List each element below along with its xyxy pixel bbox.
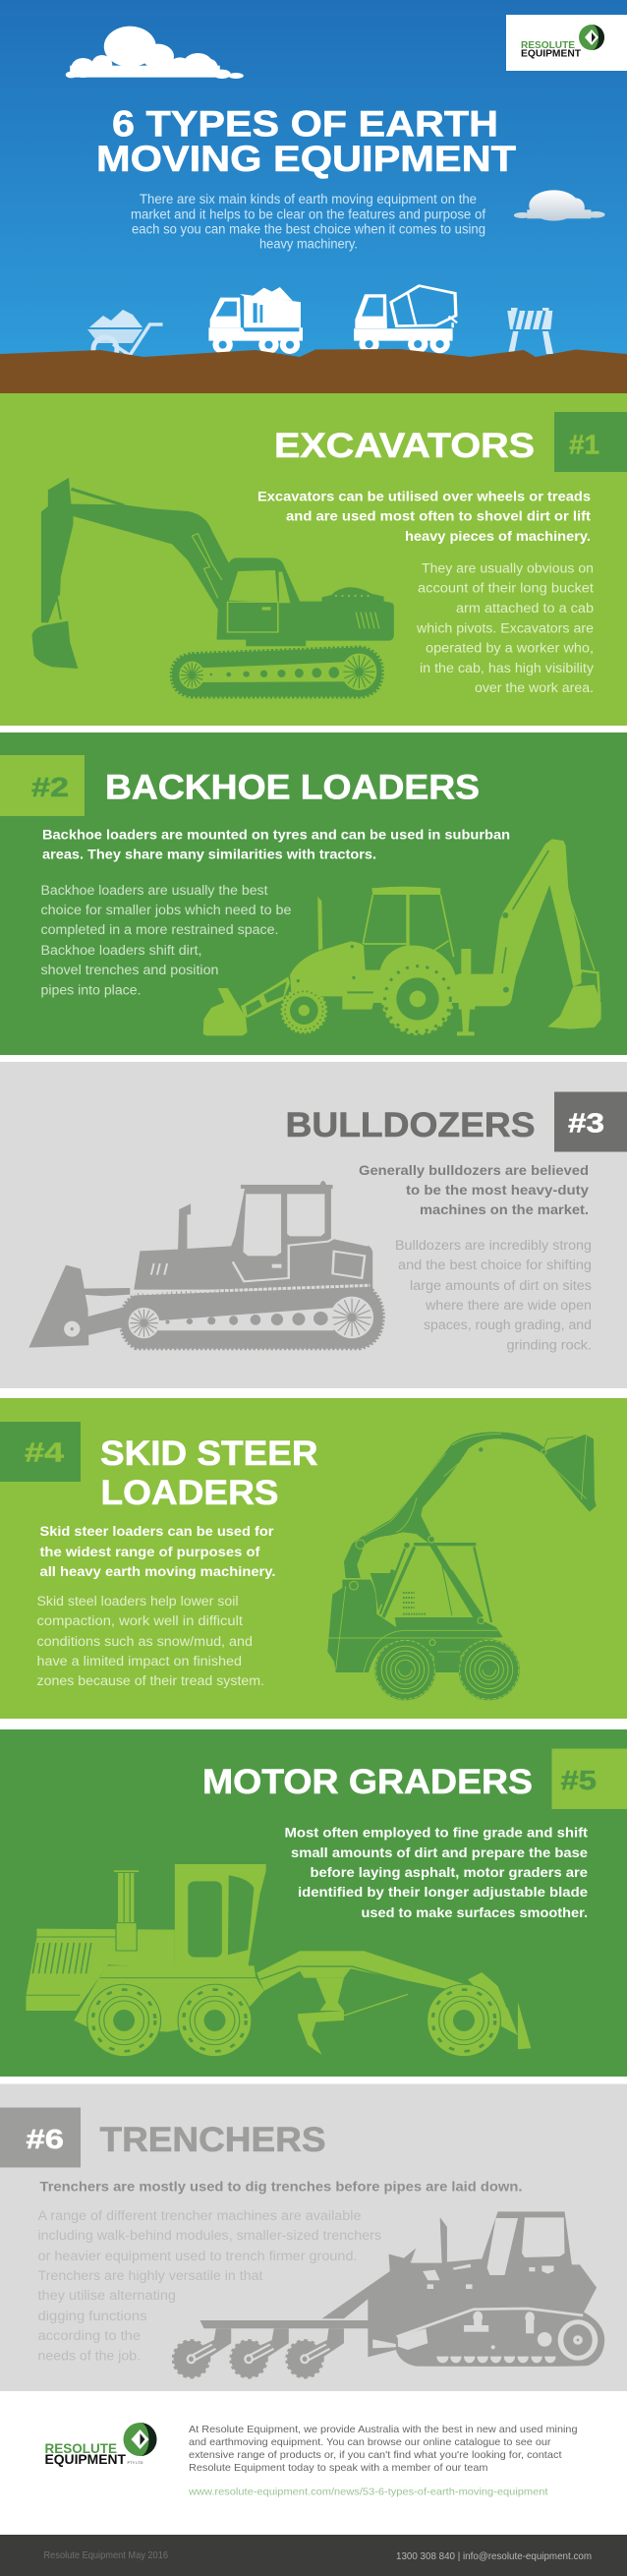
body text: including walk-behind modules, smaller-sized trenchers: [37, 2228, 381, 2243]
lead text: to be the most heavy-duty: [406, 1182, 589, 1198]
company description: [189, 2424, 578, 2474]
lead text: Backhoe loaders are mounted on tyres and can be used in suburban: [42, 826, 510, 842]
title: 6 TYPES OF EARTH: [112, 102, 498, 144]
contact details: 1300 308 840 | info@resolute-equipment.com: [396, 2550, 592, 2562]
body text: Bulldozers are incredibly strong: [395, 1238, 592, 1253]
number badge 5: #5: [560, 1765, 597, 1795]
company description: extensive range of products or, if you can't find what you're looking for, contact: [189, 2449, 562, 2461]
company description: At Resolute Equipment, we provide Australia with the best in new and used mining: [189, 2424, 578, 2435]
body text: they utilise alternating: [37, 2288, 176, 2303]
panel: excavators: [0, 393, 627, 726]
lead text: Most often employed to fine grade and shift: [285, 1825, 588, 1841]
panel: header sky: [0, 0, 627, 394]
body text: operated by a worker who,: [426, 641, 594, 655]
body text: in the cab, has high visibility: [420, 661, 594, 675]
body text: A range of different trencher machines are available: [37, 2208, 362, 2223]
lead text: used to make surfaces smoother.: [362, 1904, 588, 1920]
body text: They are usually obvious on: [422, 560, 594, 576]
heading: backhoe loaders: BACKHOE LOADERS: [105, 769, 480, 806]
lead text: heavy pieces of machinery.: [405, 528, 591, 544]
number badge 5: [552, 1748, 627, 1809]
panel: backhoe loaders: [0, 732, 627, 1055]
lead text: [359, 1162, 589, 1217]
body text: according to the: [37, 2328, 141, 2343]
body text: and the best choice for shifting: [398, 1258, 592, 1272]
lead text: and are used most often to shovel dirt or lift: [286, 507, 591, 523]
number badge 1: [554, 412, 627, 472]
intro text: heavy machinery.: [259, 236, 358, 252]
icon: motor grader: [26, 1864, 531, 2057]
lead text: [39, 1523, 275, 1579]
icon: cement mixer: [354, 286, 457, 353]
lead text: Excavators can be utilised over wheels or treads: [257, 488, 591, 503]
footer logo: PTY LTD: [128, 2461, 143, 2465]
body text: Backhoe loaders are usually the best: [41, 883, 268, 898]
lead text: identified by their longer adjustable blade: [298, 1884, 588, 1900]
icon: road barrier: [507, 308, 553, 354]
heading: skid steer loaders: SKID STEER: [100, 1434, 318, 1473]
footer logo: RESOLUTE: [45, 2440, 117, 2456]
body text: conditions such as snow/mud, and: [37, 1634, 253, 1649]
heading: trenchers: TRENCHERS: [100, 2121, 326, 2159]
lead text: small amounts of dirt and prepare the base: [291, 1844, 588, 1860]
body text: [395, 1238, 592, 1353]
body text: over the work area.: [475, 680, 594, 695]
lead text: all heavy earth moving machinery.: [39, 1563, 275, 1579]
icon: trencher: [174, 2211, 604, 2377]
icon: dump truck: [208, 287, 303, 354]
lead text: [42, 826, 510, 861]
title: [96, 102, 516, 179]
body text: [37, 2208, 381, 2364]
lead text: Trenchers are mostly used to dig trenches before pipes are laid down.: [39, 2179, 523, 2195]
panel: company footer: [0, 2391, 627, 2535]
lead text: [285, 1825, 588, 1920]
body text: digging functions: [37, 2309, 147, 2323]
number badge 4: #4: [25, 1437, 65, 1467]
body text: pipes into place.: [41, 983, 142, 997]
body text: completed in a more restrained space.: [41, 922, 279, 937]
body text: account of their long bucket: [418, 580, 594, 596]
body text: Skid steel loaders help lower soil: [37, 1594, 238, 1609]
icon: large cloud: [66, 27, 244, 79]
icon: excavator: [32, 478, 394, 697]
icon: wheelbarrow: [87, 310, 163, 361]
number badge 4: [0, 1422, 81, 1482]
panel: contact bar: [0, 2535, 627, 2576]
panel: skid steer loaders: [0, 1398, 627, 1719]
lead text: before laying asphalt, motor graders are: [311, 1864, 588, 1880]
body text: [416, 560, 594, 695]
body text: needs of the job.: [37, 2348, 141, 2364]
intro text: [131, 192, 485, 252]
number badge 1: #1: [569, 429, 599, 460]
number badge 2: #2: [31, 772, 69, 802]
body text: have a limited impact on finished: [37, 1654, 242, 1669]
ground: [0, 349, 627, 394]
heading: skid steer loaders: LOADERS: [100, 1474, 279, 1512]
body text: spaces, rough grading, and: [424, 1317, 592, 1332]
source link: www.resolute-equipment.com/news/53-6-types-of-earth-moving-equipment: [188, 2486, 548, 2497]
panel: bulldozers: [0, 1062, 627, 1388]
intro text: each so you can make the best choice when it comes to using: [132, 222, 485, 236]
number badge 2: [0, 755, 85, 816]
body text: [41, 883, 291, 997]
lead text: Generally bulldozers are believed: [359, 1162, 589, 1178]
body text: Backhoe loaders shift dirt,: [41, 943, 202, 958]
heading: bulldozers: BULLDOZERS: [285, 1106, 535, 1144]
lead text: [257, 488, 591, 544]
title: MOVING EQUIPMENT: [96, 138, 516, 179]
body text: [37, 1594, 264, 1688]
body text: compaction, work well in difficult: [37, 1613, 243, 1628]
heading: skid steer loaders: [100, 1434, 318, 1512]
body text: or heavier equipment used to trench firmer ground.: [37, 2249, 358, 2263]
logo box: EQUIPMENT: [521, 47, 582, 59]
icon: bulldozer: [28, 1181, 383, 1349]
number badge 3: #3: [568, 1107, 604, 1139]
footer logo: EQUIPMENT: [45, 2451, 126, 2467]
heading: excavators: EXCAVATORS: [274, 427, 535, 465]
lead text: areas. They share many similarities with tractors.: [42, 846, 376, 861]
icon: skid steer loader: [327, 1432, 597, 1700]
lead text: Skid steer loaders can be used for: [39, 1523, 274, 1539]
date note: Resolute Equipment May 2016: [43, 2549, 168, 2561]
body text: where there are wide open: [425, 1298, 592, 1313]
number badge 6: #6: [26, 2124, 64, 2154]
intro text: There are six main kinds of earth moving equipment on the: [140, 192, 477, 206]
body text: grinding rock.: [507, 1337, 592, 1353]
body text: which pivots. Excavators are: [416, 621, 594, 635]
panel: motor graders: [0, 1729, 627, 2077]
company description: Resolute Equipment today to speak with a member of our team: [189, 2462, 488, 2474]
body text: Trenchers are highly versatile in that: [37, 2268, 263, 2283]
heading: motor graders: MOTOR GRADERS: [202, 1763, 533, 1801]
body text: arm attached to a cab: [456, 601, 594, 615]
icon: small cloud: [514, 190, 605, 221]
body text: shovel trenches and position: [41, 963, 218, 977]
icon: backhoe loader: [203, 839, 601, 1035]
lead text: machines on the market.: [420, 1201, 589, 1217]
logo box: [506, 15, 627, 71]
panel: trenchers: [0, 2084, 627, 2391]
intro text: market and it helps to be clear on the features and purpose of: [131, 206, 485, 222]
body text: zones because of their tread system.: [37, 1673, 264, 1688]
company description: and earthmoving equipment. You can browse our online catalogue to see our: [189, 2436, 551, 2448]
lead text: the widest range of purposes of: [39, 1544, 260, 1559]
number badge 6: [0, 2108, 81, 2167]
number badge 3: [554, 1091, 627, 1152]
body text: large amounts of dirt on sites: [410, 1278, 592, 1293]
logo box: RESOLUTE: [521, 39, 575, 51]
body text: choice for smaller jobs which need to be: [41, 903, 291, 917]
footer logo: [45, 2423, 157, 2467]
